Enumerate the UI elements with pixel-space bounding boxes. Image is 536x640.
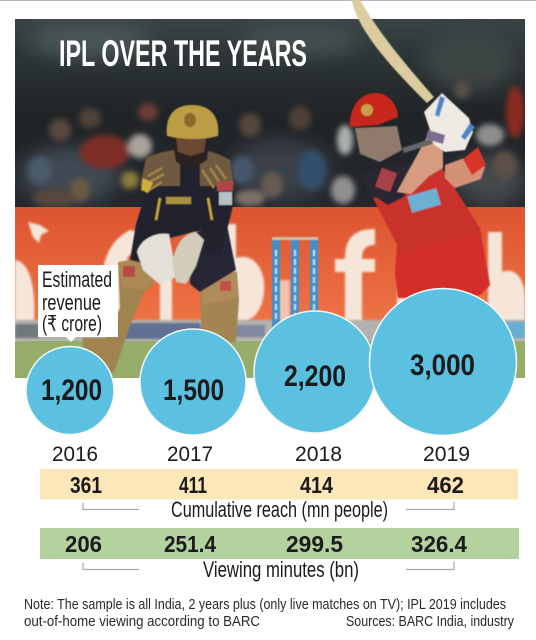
bubble 2018 [254,311,376,433]
row: cumulative reach: 462 [427,472,464,498]
row: viewing minutes: 251.4 [164,531,216,557]
row: viewing minutes: 326.4 [411,531,467,557]
row: cumulative reach: 414 [300,472,333,498]
batsman [350,93,490,298]
crowd [20,22,525,205]
bubble 2018: 2,200 [284,360,346,393]
bubble 2016: 1,200 [41,374,102,407]
row: viewing minutes: 299.5 [286,531,343,557]
bubble 2017 [140,329,246,435]
icon: stumps [272,237,318,332]
bubble 2019 [370,288,516,436]
gloves [424,93,475,152]
footnote: out-of-home viewing according to BARC [24,614,260,630]
year labels: 2017 [167,443,213,466]
board lettering [15,222,525,322]
footnote [24,597,515,630]
bubble chart: estimated revenue [26,288,516,436]
title: IPL OVER THE YEARS [59,33,307,74]
row: cumulative reach: Cumulative reach (mn people) [171,497,388,522]
bat [352,0,434,103]
bubble 2016 [26,346,114,434]
year labels [52,443,470,466]
row: viewing minutes: Viewing minutes (bn) [203,557,359,582]
year labels: 2018 [295,443,342,466]
bubble 2017: 1,500 [163,374,224,407]
row: viewing minutes [40,528,519,582]
row: cumulative reach [40,469,518,522]
row: cumulative reach: 361 [70,472,102,498]
row: cumulative reach: 411 [179,472,207,498]
callout: estimated revenue: revenue [42,290,101,315]
footnote: Sources: BARC India, industry [346,614,515,630]
wicketkeeper [82,105,239,376]
panel: stadium photo background [15,19,525,378]
row: viewing minutes: 206 [65,531,102,557]
callout: estimated revenue: (₹ crore) [42,311,102,336]
year labels: 2019 [423,443,470,466]
callout: estimated revenue [38,265,118,342]
year labels: 2016 [52,443,98,466]
bubble 2019: 3,000 [410,349,475,382]
callout: estimated revenue: Estimated [42,267,112,292]
